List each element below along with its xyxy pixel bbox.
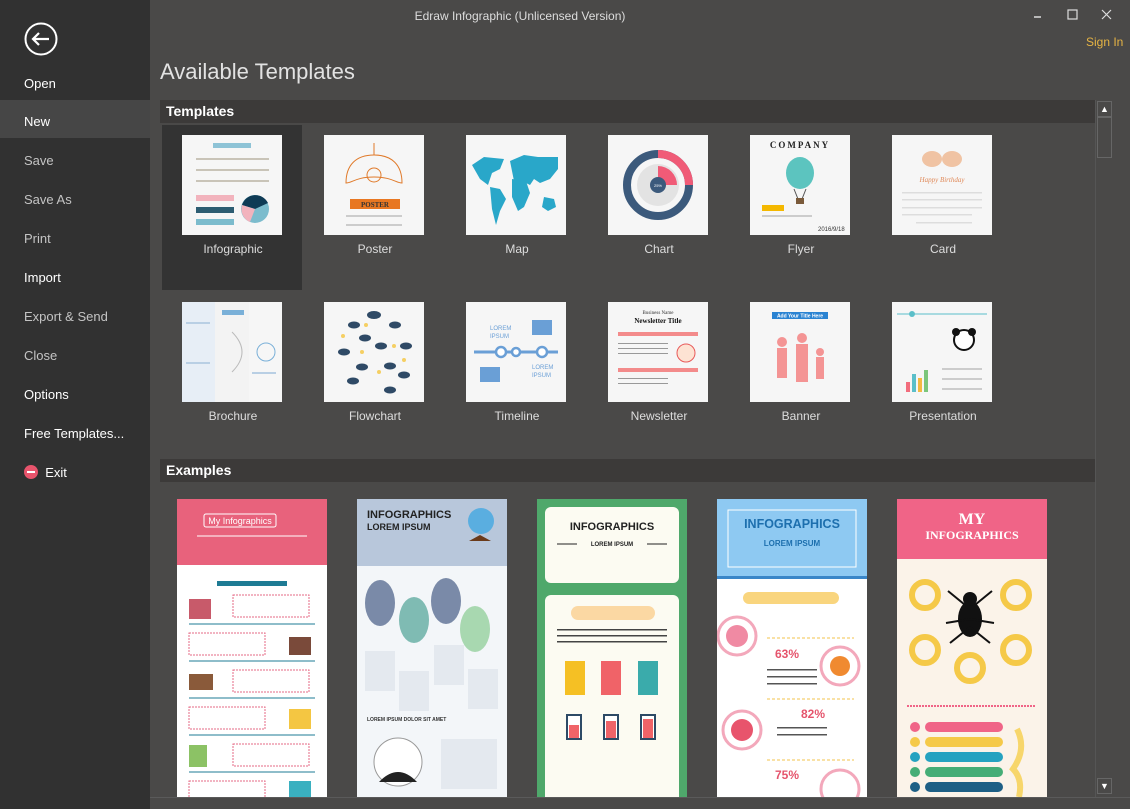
templates header xyxy=(160,100,1095,123)
thumb: Timeline xyxy=(466,302,566,402)
thumb: Chart xyxy=(608,135,708,235)
label: Infographic: Infographic xyxy=(203,242,263,256)
example 4: LOREM IPSUM xyxy=(764,539,821,548)
example 4: INFOGRAPHICS xyxy=(744,517,840,531)
label: Brochure: Brochure xyxy=(209,409,257,423)
example 2: LOREM IPSUM DOLOR SIT AMET xyxy=(367,717,446,723)
examples header: Examples xyxy=(166,462,231,478)
thumb: Infographic xyxy=(182,135,282,235)
label: Banner: Banner xyxy=(782,409,820,423)
thumb: Newsletter: Newsletter Title xyxy=(634,317,682,325)
thumb: Banner: Add Your Title Here xyxy=(777,314,823,320)
icon: back arrow xyxy=(24,22,58,56)
label: Chart: Chart xyxy=(644,242,674,256)
bottom bar xyxy=(150,797,1130,809)
example 5 xyxy=(897,499,1047,797)
menu: Print: Print xyxy=(24,231,51,246)
thumb: Flyer xyxy=(750,135,850,235)
thumb: Newsletter xyxy=(608,302,708,402)
thumb: Card: Happy Birthday xyxy=(919,176,965,184)
label: Flyer: Flyer xyxy=(788,242,814,256)
templates header: Templates xyxy=(166,103,234,119)
thumb: Flyer: 2016/9/18 xyxy=(818,227,845,233)
label: Presentation: Presentation xyxy=(909,409,977,423)
example 4 xyxy=(717,499,867,797)
label: Card: Card xyxy=(930,242,956,256)
menu: Save As: Save As xyxy=(24,192,72,207)
thumb: Timeline: LOREM xyxy=(532,365,553,371)
window controls xyxy=(1034,9,1112,20)
example 2: LOREM IPSUM xyxy=(367,522,431,532)
thumb: Presentation xyxy=(892,302,992,402)
example 4: 82% xyxy=(801,707,825,721)
example 1: My Infographics xyxy=(208,516,272,526)
scrollbar: ▼ xyxy=(1100,781,1109,791)
label: Timeline: Timeline xyxy=(495,409,539,423)
thumb: Flowchart xyxy=(324,302,424,402)
thumb: Map xyxy=(466,135,566,235)
menu: Options: Options xyxy=(24,387,69,402)
example 3: LOREM IPSUM xyxy=(591,542,633,548)
thumb: Poster xyxy=(324,135,424,235)
thumb: Brochure xyxy=(182,302,282,402)
menu: Free Templates: Free Templates... xyxy=(24,426,124,441)
menu: Import: Import xyxy=(24,270,61,285)
thumb: Card xyxy=(892,135,992,235)
sign in: Sign In xyxy=(1086,35,1123,49)
menu: New (selected): New xyxy=(24,114,50,129)
example 2 xyxy=(357,499,507,797)
scrollbar: ▲ xyxy=(1100,104,1109,114)
examples header xyxy=(160,459,1095,482)
page title: Available Templates xyxy=(160,59,355,84)
thumb: Timeline: IPSUM xyxy=(532,373,551,379)
label: Poster: Poster xyxy=(358,242,392,256)
menu: Export & Send: Export & Send xyxy=(24,309,108,324)
menu: Save: Save xyxy=(24,153,54,168)
label: Newsletter: Newsletter xyxy=(631,409,687,423)
thumb: Timeline: IPSUM xyxy=(490,334,509,340)
scrollbar xyxy=(1095,100,1112,797)
menu: Open: Open xyxy=(24,76,56,91)
sidebar xyxy=(0,0,150,809)
example 5: INFOGRAPHICS xyxy=(925,528,1019,542)
label: Flowchart: Flowchart xyxy=(349,409,401,423)
example 4: 63% xyxy=(775,647,799,661)
label: Map: Map xyxy=(505,242,529,256)
selected tile: Infographic xyxy=(162,125,302,290)
thumb: Timeline: LOREM xyxy=(490,326,511,332)
example 4: 75% xyxy=(775,768,799,782)
window title: Edraw Infographic (Unlicensed Version) xyxy=(415,9,625,23)
thumb: Flyer: COMPANY xyxy=(770,140,830,150)
example 3 xyxy=(537,499,687,797)
menu: Close: Close xyxy=(24,348,57,363)
example 5: MY xyxy=(959,511,986,528)
example 2: INFOGRAPHICS xyxy=(367,509,451,521)
menu: New (selected) xyxy=(0,100,150,138)
example 1 xyxy=(177,499,327,797)
thumb: Chart: 25% xyxy=(654,183,662,188)
thumb: Banner xyxy=(750,302,850,402)
thumb: Newsletter: Business Name xyxy=(643,311,674,316)
menu: Exit: Exit xyxy=(45,465,67,480)
thumb: Poster: POSTER xyxy=(361,201,390,209)
example 3: INFOGRAPHICS xyxy=(570,521,654,533)
